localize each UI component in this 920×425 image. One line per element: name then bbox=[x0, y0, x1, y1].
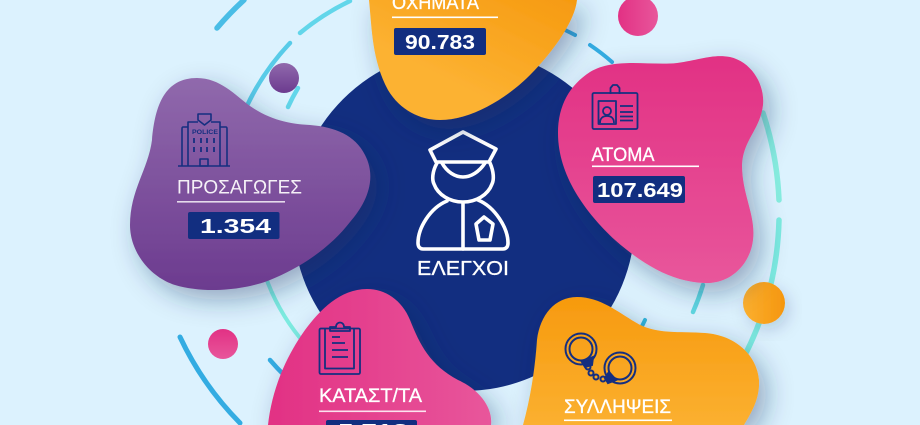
value box: 1.354 bbox=[188, 212, 280, 239]
icon: clipboard bbox=[320, 322, 360, 374]
inner dashed ring bbox=[265, 30, 645, 338]
icon: ID badge bbox=[592, 85, 638, 129]
value box: clipped number bbox=[326, 420, 417, 425]
central navy circle bbox=[293, 49, 635, 391]
decorative circle: orange right bbox=[743, 282, 785, 324]
blob: pink right bbox=[558, 56, 763, 283]
icon: handcuffs bbox=[566, 334, 636, 384]
panel: ΚΑΤΑΣΤ/ΤΑ bbox=[268, 289, 491, 425]
value box: 1.354: 1.354 bbox=[200, 216, 272, 238]
label: ΑΤΟΜΑ: ΑΤΟΜΑ bbox=[592, 145, 655, 166]
icon: police officer bbox=[418, 132, 508, 249]
decorative circle: pink bottom left bbox=[208, 329, 238, 359]
value box: 107.649 bbox=[593, 176, 685, 203]
panel: ΑΤΟΜΑ bbox=[558, 56, 763, 283]
value box: 107.649: 107.649 bbox=[597, 180, 683, 202]
icon: police building bbox=[178, 114, 230, 166]
blob: purple left bbox=[130, 78, 370, 290]
panel: ΣΥΛΛΗΨΕΙΣ bbox=[523, 297, 759, 425]
label: ΚΑΤΑΣΤ/ΤΑ: ΚΑΤΑΣΤ/ΤΑ bbox=[319, 386, 422, 407]
blob: orange top bbox=[369, 0, 577, 120]
decorative circle: pink top bbox=[618, 0, 658, 36]
panel: ΟΧΗΜΑΤΑ bbox=[369, 0, 577, 120]
panel: ΕΛΕΓΧΟΙ centre bbox=[417, 132, 509, 280]
label: ΣΥΛΛΗΨΕΙΣ: ΣΥΛΛΗΨΕΙΣ bbox=[564, 397, 671, 418]
icon: police building: POLICE bbox=[192, 130, 218, 136]
middle dashed ring bbox=[245, 1, 703, 376]
decorative circle: purple bbox=[269, 63, 299, 93]
blob: pink bottom bbox=[268, 289, 491, 425]
blob: orange bottom bbox=[523, 297, 759, 425]
label: ΠΡΟΣΑΓΩΓΕΣ: ΠΡΟΣΑΓΩΓΕΣ bbox=[177, 178, 302, 198]
value box: 90.783: 90.783 bbox=[405, 32, 475, 54]
outer dashed blue ring bbox=[180, 0, 779, 423]
label: ΕΛΕΓΧΟΙ: ΕΛΕΓΧΟΙ bbox=[417, 258, 509, 280]
panel: ΠΡΟΣΑΓΩΓΕΣ bbox=[130, 78, 370, 290]
value box: 90.783 bbox=[394, 28, 486, 55]
